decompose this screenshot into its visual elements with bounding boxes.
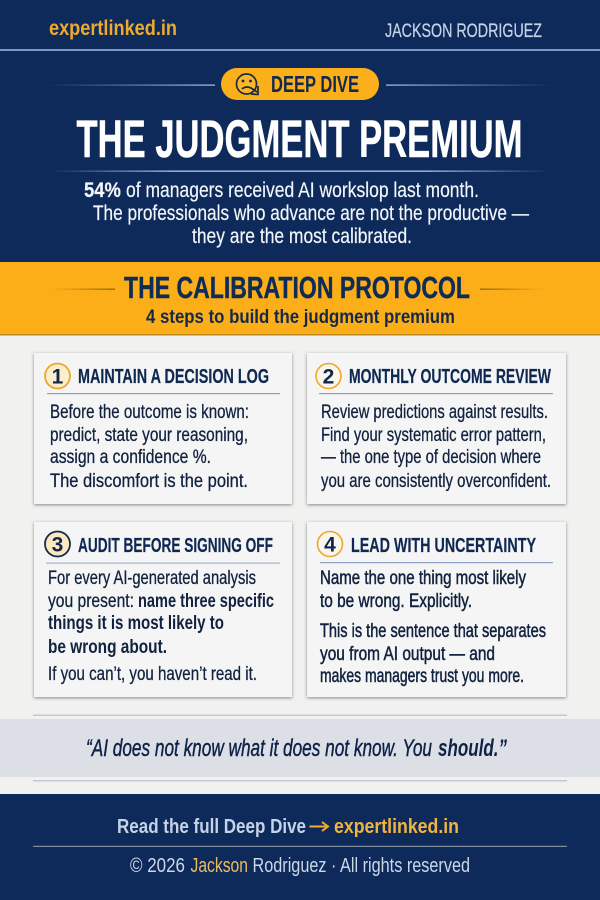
intro text: 54% — [84, 178, 121, 202]
card heading: AUDIT BEFORE SIGNING OFF — [78, 534, 273, 557]
card text — [321, 401, 551, 492]
step number 3: 3 — [52, 534, 63, 556]
bold card text: things it is most likely to — [48, 612, 224, 634]
card 2: monthly outcome review — [307, 353, 566, 504]
intro text — [84, 178, 529, 248]
step number 2 — [316, 364, 341, 388]
step number 3 — [45, 532, 70, 556]
panel: hero header — [0, 0, 600, 262]
card text: assign a confidence %. — [50, 446, 211, 468]
step number 2: 2 — [323, 366, 334, 388]
bold card text — [48, 590, 274, 658]
bold card text: name three specific — [138, 590, 274, 612]
card text: predict, state your reasoning, — [50, 424, 248, 446]
intro text: they are the most calibrated. — [192, 224, 412, 248]
panel: quote band: should.” — [438, 735, 508, 762]
arrow — [310, 822, 328, 831]
quote text: “AI does not know what it does not know. You — [86, 735, 432, 762]
copyright: © 2026 — [130, 855, 185, 877]
section subheading: 4 steps to build the judgment premium — [146, 306, 455, 328]
step number 4: 4 — [324, 534, 336, 556]
badge: deep dive — [221, 68, 379, 100]
card heading: MAINTAIN A DECISION LOG — [78, 365, 269, 388]
card text: If you can’t, you haven’t read it. — [48, 663, 257, 685]
brand name: expertlinked.in — [49, 17, 177, 40]
call to action — [117, 815, 459, 838]
section heading: THE CALIBRATION PROTOCOL — [124, 270, 470, 305]
author name: JACKSON RODRIGUEZ — [385, 20, 542, 42]
copyright — [130, 855, 470, 877]
card 1: maintain a decision log — [34, 353, 292, 504]
bold card text: be wrong about. — [48, 636, 167, 658]
card 4: lead with uncertainty — [307, 522, 566, 697]
card text: you present: — [48, 590, 134, 612]
card text — [50, 401, 249, 492]
panel: quote band — [0, 719, 600, 777]
step number 4 — [318, 532, 342, 556]
card text: Name the one thing most likely — [320, 567, 526, 589]
call to action: expertlinked.in — [334, 815, 459, 838]
card text: you from AI output — and — [320, 643, 495, 665]
copyright: Rodriguez · All rights reserved — [252, 855, 470, 877]
step number 1 — [45, 364, 70, 388]
card text: The discomfort is the point. — [50, 470, 248, 492]
badge: deep dive: DEEP DIVE — [271, 71, 359, 97]
card text: For every AI-generated analysis — [48, 567, 256, 589]
call to action: Read the full Deep Dive — [117, 815, 306, 838]
card text — [48, 567, 257, 685]
intro text: of managers received AI workslop last month. — [126, 178, 479, 202]
copyright: Jackson — [190, 855, 248, 877]
panel: footer — [0, 794, 600, 900]
card 3: audit before signing off — [34, 522, 292, 697]
icon: worried face speech bubble — [236, 74, 258, 94]
panel: calibration protocol banner — [0, 262, 600, 336]
card text — [320, 567, 546, 687]
card text: to be wrong. Explicitly. — [320, 590, 472, 612]
card text: makes managers trust you more. — [320, 665, 524, 687]
card text: Before the outcome is known: — [50, 401, 249, 423]
step number 1: 1 — [52, 366, 64, 388]
